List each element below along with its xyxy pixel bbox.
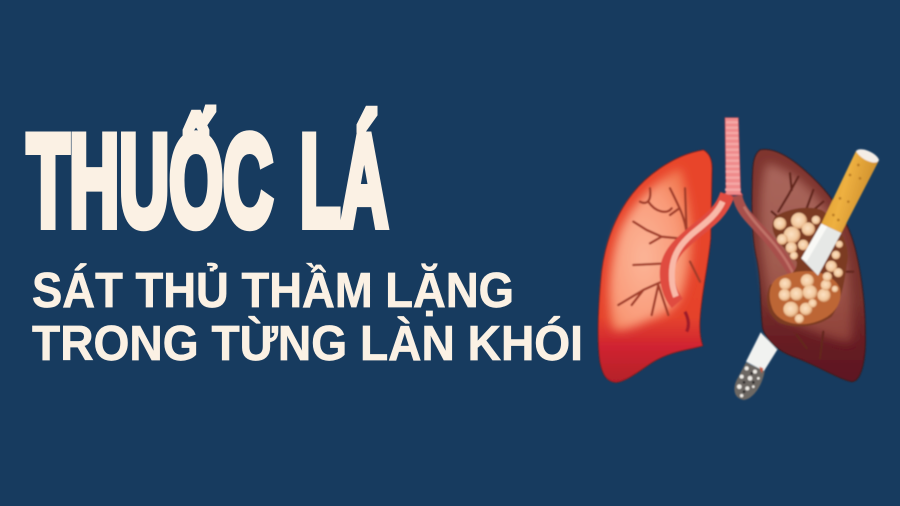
cigarette, lower burnt end [734,332,777,400]
subtitle line 1: SÁT THỦ THẦM LẶNG [32,263,514,318]
title: THUỐC LÁ: LÁ [300,108,388,254]
tumor clusters [767,208,848,326]
left bronchus [667,194,727,303]
trachea [724,118,743,195]
right diseased lung [752,150,865,382]
subtitle line 2: TRONG TỪNG LÀN KHÓI [32,316,583,371]
cigarette butt, upper [801,149,879,276]
title: THUỐC LÁ: THUỐC [27,108,273,254]
left healthy lung [598,150,712,382]
illustration: lungs with cigarette [598,118,879,400]
right bronchus [737,196,796,278]
